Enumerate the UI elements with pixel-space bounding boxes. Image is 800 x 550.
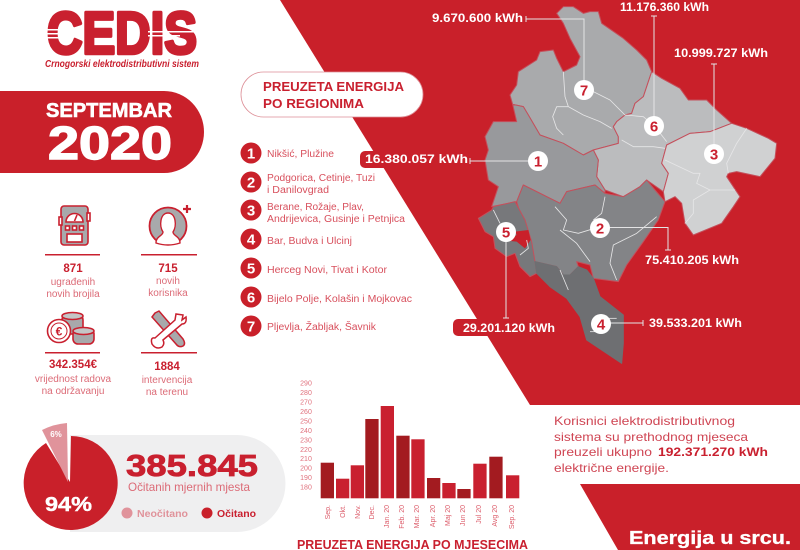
- list item 3: Berane, Rožaje, Plav,: [267, 202, 364, 213]
- value: region 7: 9.670.600 kWh: [432, 11, 523, 25]
- region 5: [478, 202, 537, 277]
- heading pill: energy by region: PO REGIONIMA: [263, 96, 365, 111]
- y axis labels: [300, 380, 312, 492]
- summary text block: 192.371.270 kWh: [658, 445, 768, 459]
- stat: field interventions: na terenu: [146, 387, 188, 398]
- date banner: [0, 91, 204, 173]
- x axis labels: Dec.: [369, 505, 376, 519]
- stat: maintenance value: na održavanju: [42, 386, 104, 397]
- list item 3: [240, 200, 405, 225]
- region 1: [485, 104, 605, 207]
- region 3: [662, 123, 777, 235]
- region 2: [517, 180, 665, 282]
- y axis labels: 270: [300, 400, 312, 406]
- map number marker 7: 7: [580, 82, 588, 100]
- bar chart: energy by month: [300, 380, 519, 529]
- map number marker 5: [496, 222, 516, 242]
- slogan: Energija u srcu.: [629, 528, 791, 548]
- legend: Neočitano: [137, 509, 188, 520]
- panel: meter readings: Očitanih mjernih mjesta: [128, 480, 250, 494]
- stat: new customers: korisnika: [148, 288, 188, 299]
- value: region 5: 29.201.120 kWh: [463, 321, 555, 335]
- y axis labels: 220: [300, 447, 312, 454]
- value label pill: region 1: [360, 151, 470, 168]
- stat: field interventions: 1884: [154, 361, 180, 373]
- x axis labels: Maj 20: [445, 505, 452, 526]
- region 4: [535, 262, 623, 363]
- stat: maintenance value: vrijednost radova: [35, 374, 112, 385]
- x axis labels: [325, 505, 516, 529]
- stat: new customers: novih: [156, 276, 180, 287]
- y axis labels: 210: [300, 456, 312, 463]
- list item 6: 6: [247, 290, 255, 306]
- x axis labels: Sep. 20: [509, 505, 516, 529]
- list item 7: Pljevlja, Žabljak, Šavnik: [267, 320, 377, 333]
- summary text block: [554, 414, 768, 475]
- y axis labels: 200: [300, 466, 312, 472]
- stat: maintenance value: [35, 312, 112, 397]
- region 6: [593, 72, 732, 197]
- map number marker 4: [591, 314, 611, 334]
- map number marker 6: [644, 116, 664, 136]
- x axis labels: Mar. 20: [414, 505, 421, 528]
- x axis labels: Jan. 20: [384, 505, 391, 528]
- summary text block: sistema su prethodnog mjeseca: [554, 430, 748, 444]
- list item 1: [240, 142, 334, 164]
- red background lower diagonal panel: [580, 484, 800, 550]
- map number marker 6: 6: [650, 118, 658, 136]
- y axis labels: 280: [300, 390, 312, 397]
- list item 5: [240, 258, 388, 278]
- map number marker 3: [704, 144, 724, 164]
- date banner: SEPTEMBAR: [46, 100, 173, 122]
- list item 2: Podgorica, Cetinje, Tuzi: [267, 173, 375, 184]
- map leader lines: [470, 16, 717, 326]
- pie chart: read vs unread: 94%: [45, 494, 92, 516]
- map of regions: [478, 7, 777, 363]
- x axis labels: Apr. 20: [430, 505, 437, 527]
- x axis labels: Avg 20: [492, 505, 499, 527]
- stat: field interventions: [141, 311, 197, 398]
- value: region 6: 11.176.360 kWh: [620, 0, 709, 14]
- list item 6: [240, 286, 412, 308]
- pie chart: read vs unread: 6%: [50, 430, 62, 439]
- legend: [122, 508, 256, 520]
- map number marker 4: 4: [597, 316, 606, 334]
- icon: user with plus: [150, 205, 191, 245]
- logo: CEDIS: CEDIS: [47, 0, 197, 66]
- region 7: [510, 7, 652, 155]
- icon: coins and euro: €: [56, 324, 63, 338]
- panel: meter readings: 385.845: [126, 448, 258, 483]
- y axis labels: 180: [300, 484, 312, 492]
- x axis labels: Okt.: [340, 505, 347, 518]
- red background upper diagonal panel: [280, 0, 800, 405]
- stat: new customers: [141, 205, 197, 299]
- x axis labels: Feb. 20: [399, 505, 406, 529]
- list item 2: 2: [247, 174, 255, 192]
- value: region 3: 10.999.727 kWh: [674, 46, 768, 60]
- list item 1: 1: [247, 146, 255, 162]
- stat: field interventions: intervencija: [142, 375, 193, 386]
- icon: electricity meter: [59, 206, 90, 245]
- region list: [240, 142, 412, 336]
- summary text block: Korisnici elektrodistributivnog: [554, 414, 735, 428]
- stat: maintenance value: 342.354€: [49, 359, 98, 371]
- map number marker 2: 2: [596, 220, 604, 238]
- stat: new meters: 871: [63, 263, 83, 275]
- list item 1: Nikšić, Plužine: [267, 149, 334, 160]
- map number marker 5: 5: [502, 224, 510, 242]
- bars: [321, 406, 519, 498]
- list item 4: Bar, Budva i Ulcinj: [267, 236, 352, 247]
- list item 3: 3: [247, 202, 255, 220]
- region 5 bay: [507, 230, 531, 248]
- list item 7: 7: [247, 318, 255, 336]
- date banner: 2020: [48, 117, 172, 169]
- x axis labels: Sep.: [325, 505, 332, 519]
- panel: meter readings: [24, 423, 285, 532]
- map number marker 7: [574, 80, 594, 100]
- stat: new meters: [45, 206, 100, 300]
- y axis labels: 240: [300, 428, 312, 435]
- x axis labels: Jul 20: [476, 505, 483, 524]
- summary text block: preuzeli ukupno: [554, 445, 652, 459]
- x axis labels: Jun 20: [460, 505, 467, 526]
- stat: new meters: ugrađenih: [51, 277, 95, 288]
- list item 7: [240, 316, 377, 336]
- map number marker 3: 3: [710, 146, 718, 164]
- value: region 2: 75.410.205 kWh: [645, 253, 739, 267]
- y axis labels: 250: [300, 418, 312, 426]
- logo: CEDIS: Crnogorski elektrodistributivni sistem: [45, 59, 199, 70]
- x axis labels: Nov.: [355, 505, 362, 519]
- map number marker 1: [528, 151, 548, 171]
- list item 4: [240, 228, 352, 250]
- stat: new meters: novih brojila: [46, 289, 100, 300]
- value: region 4: 39.533.201 kWh: [649, 316, 742, 330]
- value: region 1: 16.380.057 kWh: [365, 152, 468, 166]
- list item 6: Bijelo Polje, Kolašin i Mojkovac: [267, 294, 412, 305]
- y axis labels: 260: [300, 409, 312, 416]
- legend: Očitano: [217, 509, 256, 520]
- y axis labels: 190: [300, 475, 312, 482]
- list item 5: Herceg Novi, Tivat i Kotor: [267, 265, 388, 276]
- pie chart: read vs unread: [24, 423, 118, 530]
- list item 4: 4: [247, 232, 256, 248]
- y axis labels: 230: [300, 438, 312, 444]
- list item 2: i Danilovgrad: [267, 185, 329, 196]
- list item 5: 5: [247, 260, 255, 278]
- summary text block: električne energije.: [554, 461, 669, 475]
- icon: wrench and screwdriver: [151, 311, 186, 348]
- y axis labels: 290: [300, 380, 312, 388]
- map number marker 2: [590, 218, 610, 238]
- value label pill: region 5: [453, 319, 558, 336]
- map number marker 1: 1: [534, 154, 542, 170]
- heading pill: energy by region: [241, 72, 423, 117]
- municipal borders: [493, 72, 747, 332]
- list item 2: [240, 172, 375, 196]
- stat: new customers: 715: [158, 263, 178, 275]
- heading pill: energy by region: PREUZETA ENERGIJA: [263, 79, 405, 94]
- list item 3: Andrijevica, Gusinje i Petnjica: [267, 214, 405, 225]
